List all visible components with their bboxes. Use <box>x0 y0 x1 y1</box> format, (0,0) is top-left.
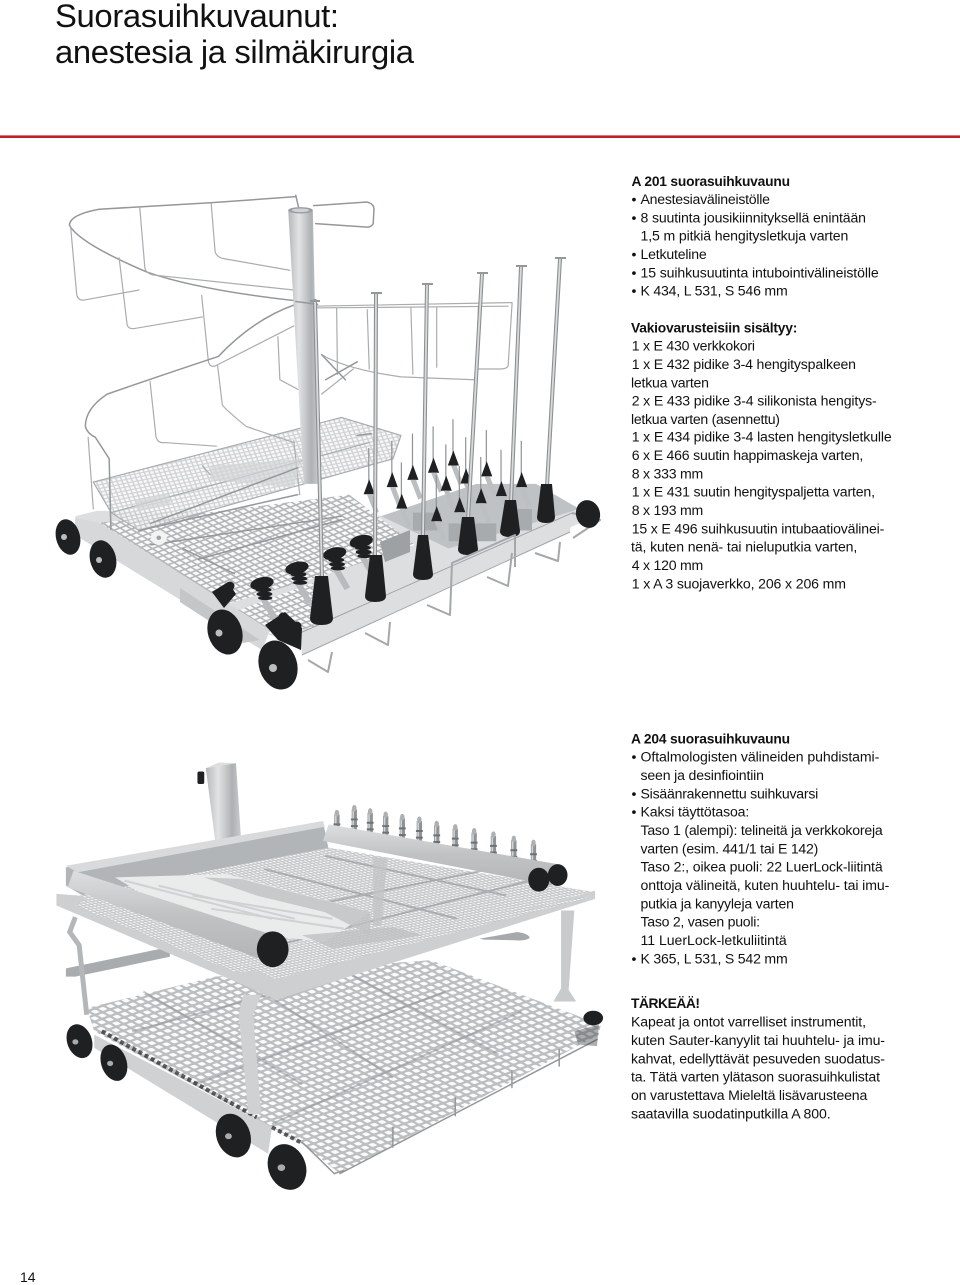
text block: important note: on varustettava Mieleltä lisävarusteena <box>631 1087 867 1103</box>
text block: standard equipment: 1 x A 3 suojaverkko, 206 x 206 mm <box>632 575 846 591</box>
small nozzles <box>364 419 531 541</box>
page number: 14 <box>20 1269 36 1285</box>
text block: A 204 description: seen ja desinfiointiin <box>640 767 764 783</box>
product photo: A 201 spiral trolley <box>52 195 603 695</box>
right wire rack <box>278 303 512 398</box>
text block: important note: Kapeat ja ontot varrelliset instrumentit, <box>631 1014 866 1030</box>
text block: A 201 description: Anestesiavälineistölle <box>640 191 770 207</box>
text block: A 204 description: Kaksi täyttötasoa: <box>640 804 749 820</box>
left connector pipe <box>68 871 289 967</box>
text block: A 201 description: A 201 suorasuihkuvaunu <box>632 174 790 189</box>
text block: standard equipment: Vakiovarusteisiin sisältyy: <box>631 320 797 335</box>
central pole <box>288 207 319 484</box>
text block: standard equipment: 8 x 193 mm <box>632 502 703 518</box>
mounting column <box>197 763 241 841</box>
text block: A 201 description: • <box>632 209 636 225</box>
text block: A 204 description: Sisäänrakennettu suihkuvarsi <box>640 785 818 801</box>
product photo: A 204 two-level trolley <box>56 763 603 1193</box>
text block: A 204 description: A 204 suorasuihkuvaunu <box>631 731 790 746</box>
text block: A 204 description: 11 LuerLock-letkuliitintä <box>640 932 787 948</box>
text block: important note: ta. Tätä varten ylätason suorasuihkulistat <box>631 1069 880 1085</box>
text block: standard equipment: 4 x 120 mm <box>632 557 703 573</box>
text block: A 204 description: • <box>632 804 636 820</box>
text block: A 201 description: • <box>632 246 636 262</box>
text block: A 201 description: • <box>632 191 636 207</box>
text block: A 201 description: 1,5 m pitkiä hengitysletkuja varten <box>640 228 848 244</box>
right connector pipe with Luer connectors <box>323 805 568 892</box>
text block: A 204 description: Taso 2, vasen puoli: <box>640 914 760 930</box>
wheels <box>63 1011 603 1193</box>
text block: important note: kuten Sauter-kanyylit tai huuhtelu- ja imu- <box>631 1032 885 1048</box>
text block: standard equipment: 1 x E 434 pidike 3-4 lasten hengitysletkulle <box>632 429 892 445</box>
base rail <box>94 1031 300 1154</box>
text block: A 204 description: Oftalmologisten välineiden puhdistami- <box>640 749 880 765</box>
text block: A 204 description: onttoja välineitä, kuten huuhtelu- tai imu- <box>640 877 890 893</box>
text block: A 204 description: putkia ja kanyyleja varten <box>640 895 794 911</box>
text block: standard equipment: letkua varten <box>631 374 709 390</box>
text block: A 201 description: K 434, L 531, S 546 mm <box>640 283 788 299</box>
text block: important note: saatavilla suodatinputkilla A 800. <box>631 1105 831 1121</box>
text block: important note: kahvat, edellyttävät pesuveden suodatus- <box>631 1050 885 1066</box>
upper tray <box>56 821 595 1000</box>
text block: standard equipment: 1 x E 431 suutin hengityspaljetta varten, <box>632 484 875 500</box>
text block: standard equipment: letkua varten (asennettu) <box>631 411 780 427</box>
text block: A 201 description: • <box>632 283 636 299</box>
red header rule <box>0 135 960 138</box>
text block: important note <box>631 995 885 1121</box>
spring holders <box>151 531 374 618</box>
title <box>55 0 415 70</box>
wire feet and side handle <box>308 513 600 672</box>
text block: A 204 description <box>631 731 890 966</box>
wire basket <box>93 417 401 531</box>
text block: A 204 description: • <box>632 749 636 765</box>
front leg <box>239 995 261 1114</box>
text block: A 201 description: Letkuteline <box>640 246 707 262</box>
text block: standard equipment: 1 x E 430 verkkokori <box>632 338 755 354</box>
title: anestesia ja silmäkirurgia <box>55 33 415 70</box>
text block: A 204 description: varten (esim. 441/1 tai E 142) <box>640 840 818 856</box>
text block: standard equipment: 15 x E 496 suihkusuutin intubaatiovälinei- <box>632 520 885 536</box>
text block: standard equipment <box>631 320 892 591</box>
text block: important note: TÄRKEÄÄ! <box>631 995 700 1011</box>
text block: standard equipment: 1 x E 432 pidike 3-4 hengityspalkeen <box>632 356 856 372</box>
text block: A 201 description: • <box>632 264 636 280</box>
rear cross bar and legs <box>66 910 576 1015</box>
text block: standard equipment: 2 x E 433 pidike 3-4 silikonista hengitys- <box>632 393 877 409</box>
wheels <box>52 498 603 695</box>
text block: standard equipment: tä, kuten nenä- tai nieluputkia varten, <box>631 539 857 555</box>
lower mesh basket <box>87 960 601 1174</box>
text block: A 201 description <box>632 174 879 299</box>
text block: A 204 description: K 365, L 531, S 542 mm <box>640 950 788 966</box>
text block: A 204 description: Taso 2:, oikea puoli: 22 LuerLock-liitintä <box>640 859 883 875</box>
front rail, rods and handles <box>75 258 572 655</box>
upper spiral wire rack <box>69 195 374 541</box>
text block: A 204 description: • <box>632 785 636 801</box>
text block: A 201 description: 8 suutinta jousikiinnityksellä enintään <box>640 209 866 225</box>
text block: standard equipment: 6 x E 466 suutin happimaskeja varten, <box>632 447 863 463</box>
rear base tray and meshes <box>75 484 588 645</box>
text block: A 201 description: 15 suihkusuutinta intubointivälineistölle <box>640 264 879 280</box>
text block: A 204 description: Taso 1 (alempi): telineitä ja verkkokoreja <box>640 822 883 838</box>
text block: standard equipment: 8 x 333 mm <box>632 465 703 481</box>
text block: A 204 description: • <box>632 950 636 966</box>
